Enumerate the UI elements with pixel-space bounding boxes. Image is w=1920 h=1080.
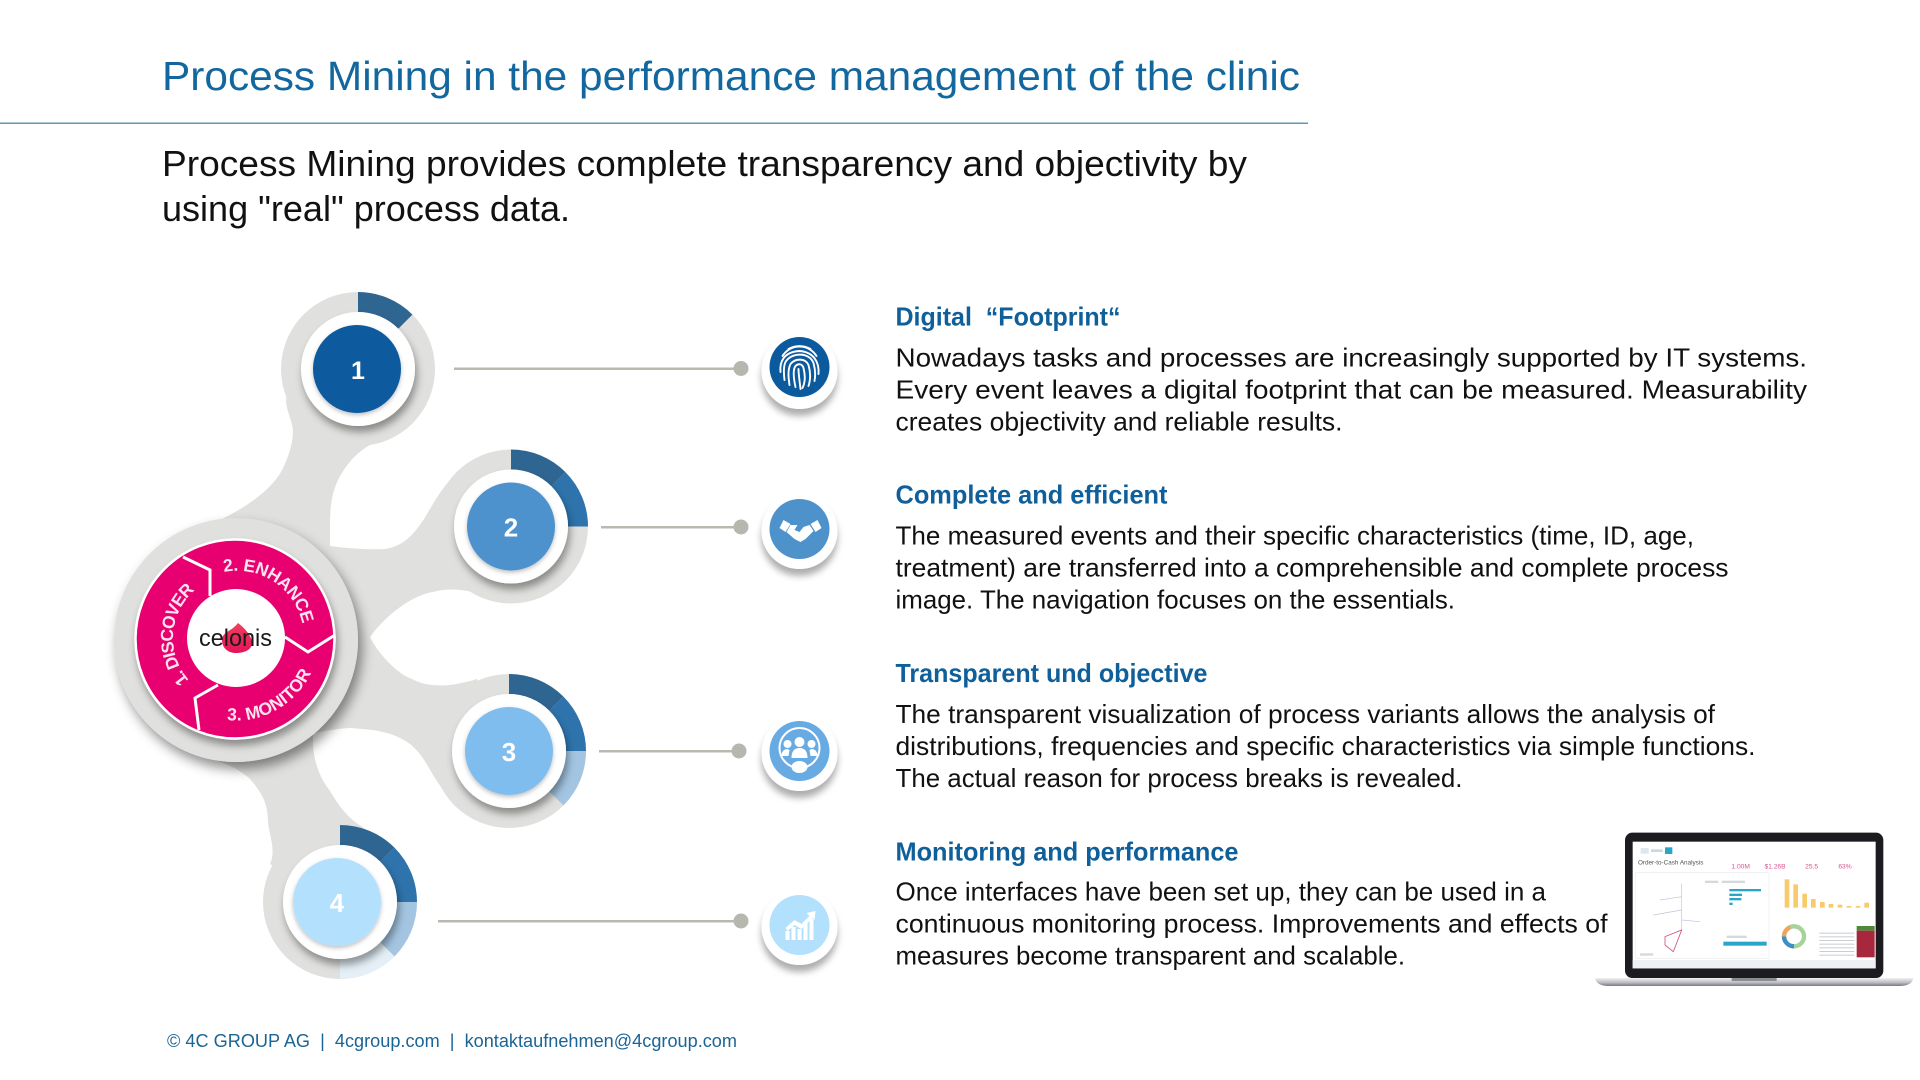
section: Monitoring and performance: Once interfaces have been set up, they can be used in a <box>896 876 1547 906</box>
dashboard KPIs: 1.00M <box>1731 864 1750 871</box>
segment labels <box>160 559 314 721</box>
order table <box>1819 926 1875 957</box>
section: Monitoring and performance: measures become transparent and scalable. <box>896 940 1405 970</box>
section: Digital Footprint: Digital “Footprint“ <box>896 302 1120 332</box>
icon: handshake <box>762 493 838 569</box>
section: Complete and efficient: image. The navigation focuses on the essentials. <box>896 584 1455 614</box>
segment labels: 3. MONITOR <box>227 668 312 721</box>
section: Complete and efficient: Complete and efficient <box>896 480 1168 510</box>
segment dividers <box>183 557 335 730</box>
segment labels: 1. DISCOVER <box>160 584 194 686</box>
dashboard title: Order-to-Cash Analysis <box>1638 860 1703 867</box>
node 2: 2 <box>504 512 518 542</box>
section: Monitoring and performance: continuous monitoring process. Improvements and effects of <box>896 908 1608 938</box>
dashboard KPIs: 63% <box>1838 864 1852 871</box>
section: Monitoring and performance <box>896 836 1608 970</box>
donut chart <box>1784 926 1804 946</box>
section: Transparent und objective: distributions, frequencies and specific characteristics via simple functions. <box>896 731 1756 761</box>
dashboard KPIs: $1.26B <box>1764 864 1786 871</box>
section: Monitoring and performance: Monitoring and performance <box>896 836 1238 866</box>
icon: fingerprint <box>762 333 838 409</box>
section: Digital Footprint: creates objectivity and reliable results. <box>896 406 1342 436</box>
footer: © 4C GROUP AG | 4cgroup.com | kontaktaufnehmen@4cgroup.com <box>167 1030 737 1051</box>
section: Digital Footprint: Nowadays tasks and processes are increasingly supported by IT systems. <box>896 342 1807 372</box>
subtitle: using "real" process data. <box>162 188 570 229</box>
celonis drop <box>222 623 252 653</box>
node 1 <box>281 292 435 446</box>
node 3: 3 <box>502 737 516 767</box>
title: Process Mining in the performance management of the clinic <box>162 53 1300 99</box>
connector 2 <box>601 520 748 534</box>
node 1: 1 <box>351 357 365 385</box>
dashboard KPIs: 25.5 <box>1805 864 1818 871</box>
central hub <box>110 517 370 778</box>
dashboard toolbar <box>1641 847 1672 854</box>
section: Transparent und objective: Transparent und objective <box>896 658 1208 688</box>
subtitle: Process Mining provides complete transparency and objectivity by <box>162 143 1247 184</box>
throughput bar chart <box>1785 879 1869 908</box>
icon: growth chart <box>762 889 838 965</box>
subtitle <box>162 143 1247 229</box>
segment labels: 2. ENHANCE <box>224 559 314 624</box>
section: Transparent und objective: The actual reason for process breaks is revealed. <box>896 763 1462 793</box>
node 4: 4 <box>330 888 345 918</box>
icon: team <box>762 715 838 791</box>
connector 1 <box>454 361 748 376</box>
section: Transparent und objective <box>896 658 1756 793</box>
process explorer <box>1636 873 1769 958</box>
connector 4 <box>438 914 748 928</box>
section: Complete and efficient: The measured events and their specific characteristics (time, ID, age, <box>896 520 1694 550</box>
central hub: celonis <box>199 625 272 652</box>
dashboard KPIs <box>1731 864 1852 871</box>
node 2 <box>434 450 588 604</box>
branching diagram background <box>212 369 511 902</box>
connector 3 <box>599 744 746 758</box>
section: Digital Footprint <box>896 302 1807 436</box>
section: Complete and efficient <box>896 480 1728 614</box>
title rule <box>0 122 1308 124</box>
section: Transparent und objective: The transparent visualization of process variants allows the analysis of <box>896 699 1716 729</box>
laptop with dashboard <box>1595 833 1913 986</box>
node 4 <box>263 825 417 979</box>
section: Complete and efficient: treatment) are transferred into a comprehensible and complete process <box>896 552 1728 582</box>
section: Digital Footprint: Every event leaves a digital footprint that can be measured. Measurability <box>896 374 1807 404</box>
node 3 <box>432 674 586 828</box>
